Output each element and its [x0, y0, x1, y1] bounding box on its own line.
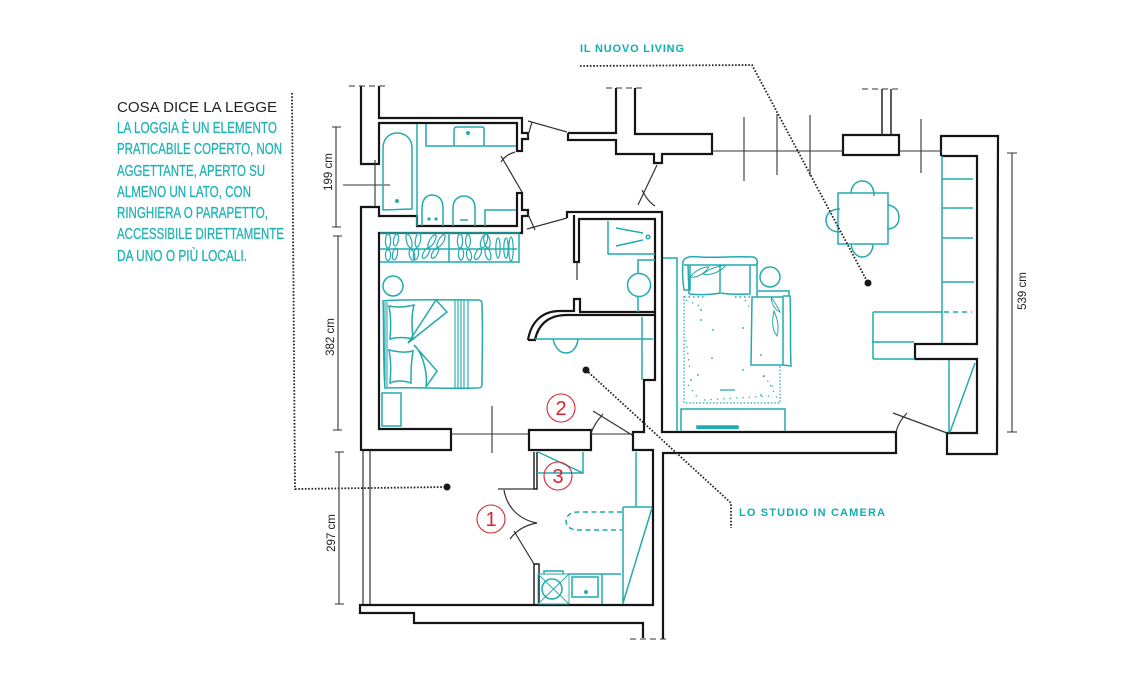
callout: study leader	[582, 366, 731, 528]
callout: loggia leader	[292, 93, 450, 490]
loggia fixtures	[537, 452, 652, 604]
callout: living leader	[580, 65, 872, 286]
icon: chaise	[751, 291, 791, 366]
dimension: 199 cm: 199 cm	[323, 153, 335, 191]
icon: storage shelving	[942, 156, 974, 343]
icon: bidet	[453, 196, 475, 226]
icon: washing machine	[538, 574, 569, 604]
icon: closet panel	[663, 258, 677, 431]
icon: wardrobe niche	[949, 360, 975, 433]
door swings	[527, 121, 567, 139]
wardrobe	[380, 233, 519, 262]
bed and bedroom furniture	[382, 276, 482, 426]
windows and doors	[343, 89, 947, 604]
body text: definition of loggia	[117, 118, 284, 265]
body text: definition of loggia: AGGETTANTE, APERTO SU	[117, 163, 265, 180]
icon: triangle cabinet	[537, 452, 583, 473]
marker 2	[547, 394, 575, 422]
icon: sofa	[683, 257, 757, 295]
icon: dashed ironing board	[566, 512, 622, 530]
icon: sink	[569, 574, 621, 604]
icon: nightstand circle	[383, 276, 403, 296]
dimension: 539 cm	[1007, 153, 1029, 432]
icon: rug	[684, 296, 780, 403]
body text: definition of loggia: ACCESSIBILE DIRETTAMENTE	[117, 226, 284, 243]
marker 1: 1	[485, 509, 497, 531]
icon: counter with sink	[426, 124, 516, 146]
icon: toilet	[422, 195, 443, 226]
body text: definition of loggia: LA LOGGIA È UN ELEMENTO	[117, 118, 277, 137]
label: lo studio in camera: LO STUDIO IN CAMERA	[739, 507, 885, 519]
icon: washbasin	[628, 274, 650, 296]
label: il nuovo living: IL NUOVO LIVING	[580, 43, 684, 55]
icon: bathtub	[383, 133, 412, 210]
icon: shelf	[485, 210, 516, 226]
marker 3	[544, 462, 572, 490]
body text: definition of loggia: RINGHIERA O PARAPETTO,	[117, 205, 268, 222]
marker 3: 3	[552, 466, 564, 488]
bathroom fixtures	[383, 124, 516, 226]
body text: definition of loggia: DA UNO O PIÙ LOCALI.	[117, 246, 247, 265]
text block: cosa dice la legge	[117, 99, 284, 265]
marker 2: 2	[555, 398, 567, 420]
dashed wall stubs	[349, 86, 901, 639]
icon: small bench	[382, 393, 401, 426]
dimension: 539 cm: 539 cm	[1017, 272, 1029, 310]
icon: dining table with chairs	[826, 181, 899, 257]
icon: side table	[760, 267, 780, 287]
dimension: 382 cm	[325, 236, 342, 430]
dimension: 199 cm	[323, 127, 341, 227]
floor plan walls	[360, 86, 998, 639]
study desk	[535, 317, 653, 380]
dimension: 297 cm: 297 cm	[326, 514, 338, 552]
living room furniture	[663, 156, 975, 433]
heading: cosa dice la legge: COSA DICE LA LEGGE	[117, 99, 277, 116]
body text: definition of loggia: ALMENO UN LATO, CON	[117, 184, 251, 201]
icon: double bed	[383, 300, 482, 388]
body text: definition of loggia: PRATICABILE COPERTO, NON	[117, 141, 282, 158]
icon: shower	[608, 221, 655, 254]
dimension: 297 cm	[326, 452, 344, 604]
second bathroom fixtures	[608, 221, 655, 312]
marker 1	[477, 505, 505, 533]
dimension: 382 cm: 382 cm	[325, 318, 337, 356]
icon: tv unit	[681, 409, 785, 431]
